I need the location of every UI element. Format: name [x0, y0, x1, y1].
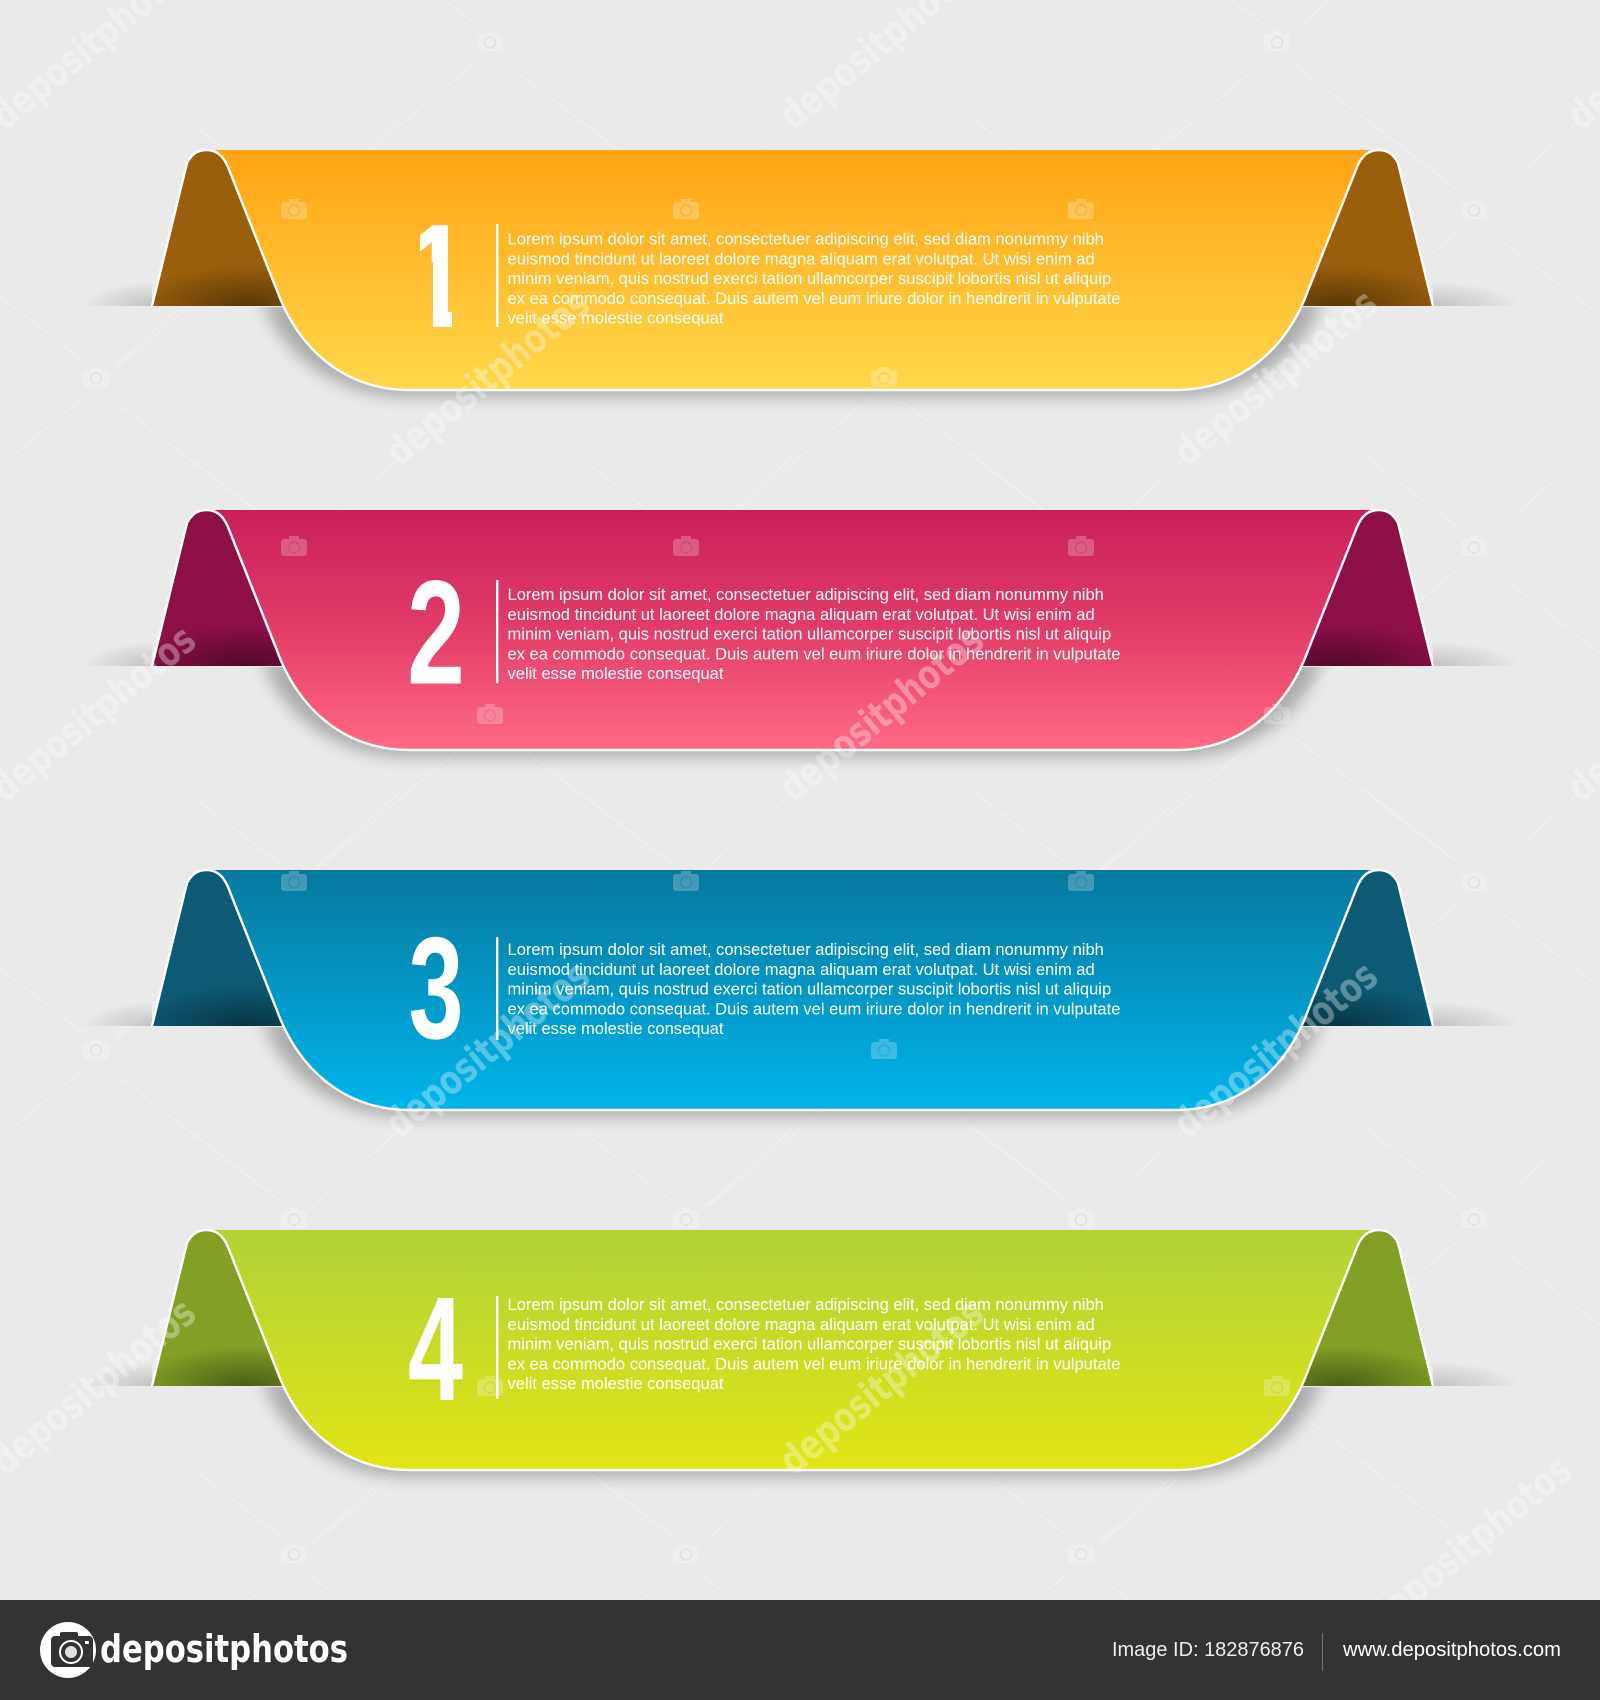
banner 3 right fold: [1302, 870, 1433, 1026]
divider 3: [496, 937, 498, 1040]
text block 2: Lorem ipsum dolor sit amet, consectetuer adipiscing elit, sed diam nonummy nibh: [508, 585, 1104, 604]
text block 1: velit esse molestie consequat: [508, 309, 724, 328]
banner 3 ribbon: [214, 870, 1371, 1110]
banner 1: orange: [82, 150, 1521, 397]
divider 1: [496, 224, 498, 327]
text block 2: ex ea commodo consequat. Duis autem vel eum iriure dolor in hendrerit in vulputate: [508, 644, 1120, 663]
banner 4 ribbon: [214, 1230, 1371, 1470]
text block 4: ex ea commodo consequat. Duis autem vel eum iriure dolor in hendrerit in vulputate: [508, 1354, 1120, 1373]
banner 2 right fold: [1302, 510, 1433, 666]
text block 4: velit esse molestie consequat: [508, 1374, 724, 1393]
banner 4 left fold: [152, 1230, 283, 1386]
divider 4: [496, 1296, 498, 1399]
watermark camera icons: [83, 31, 1487, 1563]
banner 2: crimson: [82, 510, 1521, 757]
number 4: 4: [408, 1266, 463, 1432]
banner 2 shadows: [82, 642, 1521, 757]
footer bar: [0, 1600, 1600, 1700]
banner 3 shadows: [82, 1002, 1521, 1117]
watermark wordmarks: depositphotos: [771, 1290, 993, 1484]
banner 1 right fold: [1302, 150, 1433, 306]
footer logo icon: camera: [40, 1622, 96, 1678]
text block 3: euismod tincidunt ut laoreet dolore magna aliquam erat volutpat. Ut wisi enim ad: [508, 960, 1095, 979]
text block 1: Lorem ipsum dolor sit amet, consectetuer adipiscing elit, sed diam nonummy nibh: [508, 230, 1104, 248]
image id: Image ID: 182876876: [1112, 1639, 1304, 1661]
text block 2: minim veniam, quis nostrud exerci tation ullamcorper suscipit lobortis nisl ut aliquip: [508, 625, 1111, 644]
text block 1: ex ea commodo consequat. Duis autem vel eum iriure dolor in hendrerit in vulputate: [508, 289, 1120, 308]
footer logo wordmark: depositphotos: [100, 1627, 348, 1671]
watermark wordmarks: depositphotos: [1165, 953, 1387, 1147]
text block 2: velit esse molestie consequat: [508, 664, 724, 683]
text block 3: Lorem ipsum dolor sit amet, consectetuer adipiscing elit, sed diam nonummy nibh: [508, 940, 1104, 959]
watermark wordmarks: depositphotos: [771, 617, 993, 811]
text block 3: ex ea commodo consequat. Duis autem vel eum iriure dolor in hendrerit in vulputate: [508, 999, 1120, 1018]
text block 1: euismod tincidunt ut laoreet dolore magna aliquam erat volutpat. Ut wisi enim ad: [508, 249, 1095, 268]
banner 3 left fold: [152, 870, 283, 1026]
watermark wordmarks: depositphotos: [377, 281, 599, 475]
text block 4: minim veniam, quis nostrud exerci tation ullamcorper suscipit lobortis nisl ut aliquip: [508, 1335, 1111, 1354]
footer divider: [1322, 1633, 1323, 1671]
banner 4 right fold: [1302, 1230, 1433, 1386]
banner 3: blue: [82, 870, 1521, 1117]
banner 4: lime: [82, 1230, 1521, 1477]
text block 1: minim veniam, quis nostrud exerci tation ullamcorper suscipit lobortis nisl ut aliquip: [508, 269, 1111, 288]
text block 2: euismod tincidunt ut laoreet dolore magna aliquam erat volutpat. Ut wisi enim ad: [508, 605, 1095, 624]
text block 4: euismod tincidunt ut laoreet dolore magna aliquam erat volutpat. Ut wisi enim ad: [508, 1315, 1095, 1334]
text block 3: velit esse molestie consequat: [508, 1019, 724, 1038]
divider 2: [496, 580, 498, 683]
watermark wordmarks: depositphotos: [377, 953, 599, 1147]
banner 1 ribbon: [214, 150, 1371, 390]
website: www.depositphotos.com: [1342, 1639, 1561, 1661]
text block 3: minim veniam, quis nostrud exerci tation ullamcorper suscipit lobortis nisl ut aliquip: [508, 980, 1111, 999]
banner 2 ribbon: [214, 510, 1371, 750]
text block 4: Lorem ipsum dolor sit amet, consectetuer adipiscing elit, sed diam nonummy nibh: [508, 1295, 1104, 1314]
number 3: 3: [409, 908, 463, 1070]
banner 4 shadows: [82, 1362, 1521, 1477]
number 1: 1: [404, 194, 470, 359]
watermark wordmarks: depositphotos: [1165, 281, 1387, 475]
number 2: 2: [407, 550, 465, 716]
banner 1 left fold: [152, 150, 283, 306]
banner 2 left fold: [152, 510, 283, 666]
banner 1 shadows: [82, 282, 1521, 397]
